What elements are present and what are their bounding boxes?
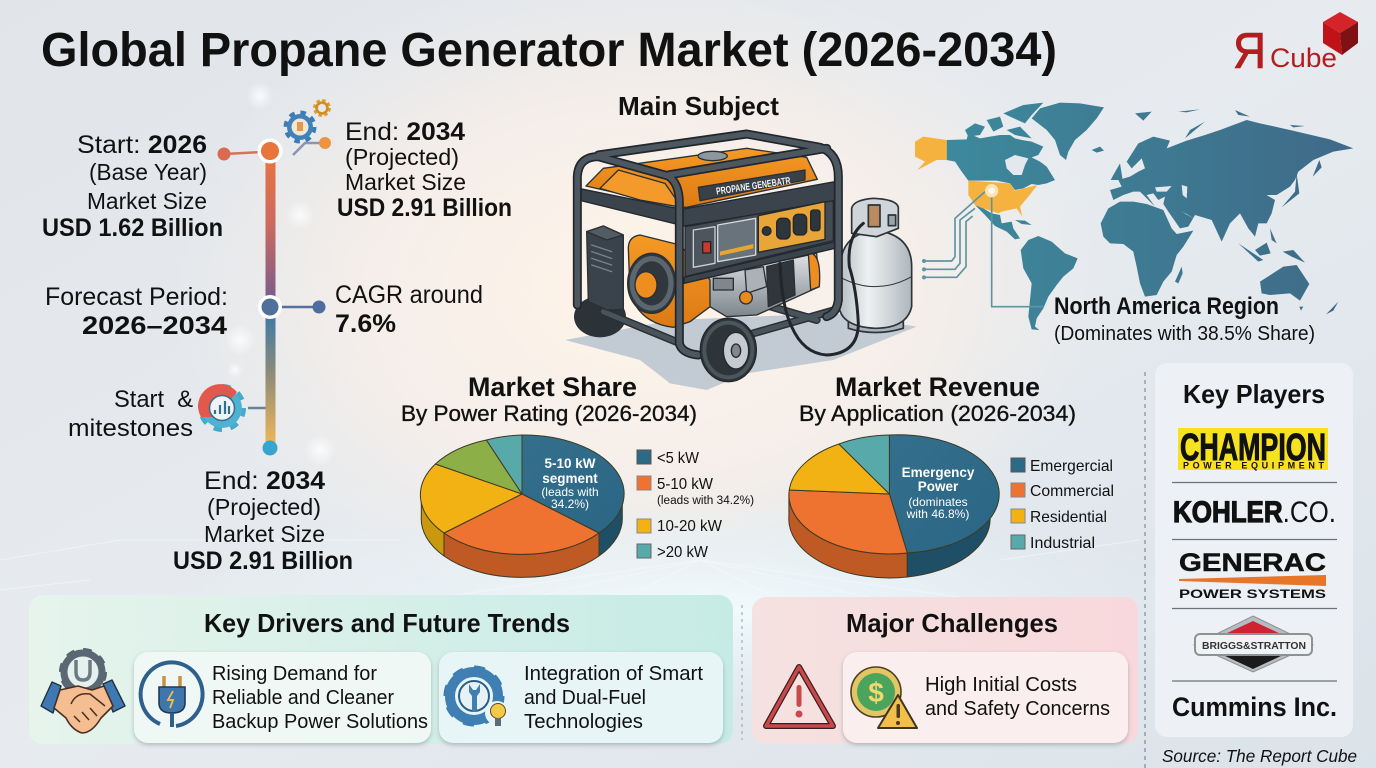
legend: power rating: 10-20 kW bbox=[657, 518, 722, 535]
propane tank bbox=[839, 198, 912, 332]
logo: champion: POWER EQUIPMENT bbox=[1183, 460, 1324, 470]
highlighted North America bbox=[915, 137, 1037, 217]
text: rising demand: Rising Demand for bbox=[212, 663, 377, 685]
text: end top: End: 2034 bbox=[345, 118, 465, 146]
pie label: 5-10 kW: segment bbox=[542, 471, 598, 486]
pie label: emergency power bbox=[902, 465, 975, 521]
pie label: 5-10 kW: 34.2%) bbox=[551, 497, 589, 511]
pie label: emergency power: Emergency bbox=[902, 465, 975, 480]
text: cagr: CAGR around bbox=[335, 281, 483, 309]
panel: major challenges bbox=[752, 597, 1138, 744]
card: high costs bbox=[843, 652, 1128, 743]
logo: kohler: KOHLER.CO. bbox=[1173, 496, 1336, 529]
alternator bbox=[707, 253, 820, 317]
text: forecast period: Forecast Period: bbox=[45, 283, 228, 311]
text: north america region: (Dominates with 38.5% Share) bbox=[1054, 323, 1315, 345]
card: rising demand bbox=[134, 652, 431, 743]
legend: power rating: <5 kW bbox=[657, 450, 699, 467]
legend: application: Industrial bbox=[1030, 535, 1095, 552]
icon: handshake with gear bbox=[41, 652, 125, 733]
icon: end gears bbox=[287, 102, 331, 149]
orange hood bbox=[586, 148, 817, 207]
heading: market share: By Power Rating (2026-2034) bbox=[401, 401, 697, 426]
heading: major challenges: Major Challenges bbox=[846, 608, 1058, 638]
heading: market share: Market Share bbox=[468, 372, 637, 402]
icon: dollar coin with warning bbox=[851, 667, 917, 728]
pie label: emergency power: Power bbox=[918, 479, 959, 494]
icon: milestones gear bbox=[198, 384, 242, 428]
text: rising demand: Backup Power Solutions bbox=[212, 711, 428, 733]
heading: key drivers: Key Drivers and Future Trends bbox=[204, 608, 570, 638]
icon: dollar coin with warning: $ bbox=[868, 677, 884, 708]
text: north america region: North America Region bbox=[1054, 293, 1279, 320]
text: high costs: High Initial Costs bbox=[925, 674, 1077, 696]
pie label: emergency power: with 46.8%) bbox=[906, 507, 969, 521]
text: high costs bbox=[925, 674, 1110, 720]
pie label: 5-10 kW: (leads with bbox=[541, 485, 599, 499]
illustration: propane generator: PROPANE GENEBATR bbox=[715, 176, 791, 198]
pie chart: power rating bbox=[420, 435, 624, 577]
source note: Source: The Report Cube bbox=[1162, 746, 1357, 766]
text: integration: Technologies bbox=[524, 711, 643, 733]
text: start: Start: 2026 bbox=[77, 131, 207, 159]
logo: generac: POWER SYSTEMS bbox=[1179, 589, 1326, 601]
legend: application bbox=[1011, 458, 1114, 552]
heading: key players: Key Players bbox=[1183, 379, 1325, 409]
text: end top bbox=[337, 118, 512, 222]
text: integration bbox=[524, 663, 703, 733]
text: cagr bbox=[335, 281, 483, 338]
logo: RCube: Cube bbox=[1270, 43, 1337, 73]
text: high costs: and Safety Concerns bbox=[925, 698, 1110, 720]
text: milestones bbox=[68, 386, 193, 442]
legend: power rating: (leads with 34.2%) bbox=[657, 495, 754, 507]
panel: key players bbox=[1155, 363, 1353, 737]
legend: application: Commercial bbox=[1030, 483, 1114, 500]
text: end bottom: Market Size bbox=[204, 521, 325, 547]
text: forecast period bbox=[45, 283, 228, 340]
heading: market revenue bbox=[799, 372, 1076, 426]
logo: briggs and stratton bbox=[1194, 616, 1313, 672]
engine bbox=[587, 226, 710, 327]
text: end top: USD 2.91 Billion bbox=[337, 194, 512, 222]
node: cagr bbox=[258, 295, 326, 319]
frame tubes bbox=[577, 134, 838, 355]
pie chart: application bbox=[789, 435, 999, 578]
control panel bbox=[578, 182, 835, 283]
node: start bbox=[218, 138, 282, 164]
front wheel bbox=[700, 318, 756, 382]
legend: application: Residential bbox=[1030, 509, 1107, 526]
text: forecast period: 2026–2034 bbox=[82, 312, 227, 340]
pie label: 5-10 kW: 5-10 kW bbox=[544, 456, 596, 471]
pie label: 5-10 kW bbox=[541, 456, 599, 511]
logo: generac bbox=[1179, 549, 1326, 601]
text: cagr: 7.6% bbox=[335, 310, 396, 338]
legend: power rating: >20 kW bbox=[657, 544, 708, 561]
text: rising demand bbox=[212, 663, 428, 733]
continents bbox=[947, 103, 1353, 330]
text: start: USD 1.62 Billion bbox=[42, 214, 223, 242]
text: start bbox=[42, 131, 223, 242]
text: start: (Base Year) bbox=[89, 159, 207, 185]
panel: key drivers and future trends bbox=[29, 595, 733, 744]
text: end bottom: (Projected) bbox=[207, 494, 321, 520]
heading: market revenue: By Application (2026-2034) bbox=[799, 401, 1076, 426]
heading: market share bbox=[401, 372, 697, 426]
title: Global Propane Generator Market (2026-2034) bbox=[41, 24, 1057, 77]
logo: cummins: Cummins Inc. bbox=[1172, 692, 1337, 722]
text: milestones: mitestones bbox=[68, 415, 193, 442]
timeline connectors bbox=[224, 143, 325, 408]
timeline bar bbox=[266, 150, 276, 445]
legend: power rating: 5-10 kW bbox=[657, 476, 713, 493]
text: end top: Market Size bbox=[345, 169, 466, 195]
text: integration: Integration of Smart bbox=[524, 663, 703, 685]
text: integration: and Dual-Fuel bbox=[524, 687, 646, 709]
text: rising demand: Reliable and Cleaner bbox=[212, 687, 394, 709]
timeline bbox=[42, 102, 512, 575]
node: end bbox=[262, 440, 278, 456]
location pin glow bbox=[985, 184, 998, 197]
icon: warning triangle bbox=[766, 667, 833, 726]
logo: RCube: Я bbox=[1233, 23, 1266, 79]
callout lines bbox=[924, 191, 1043, 307]
pie label: emergency power: (dominates bbox=[908, 495, 968, 509]
text: start: Market Size bbox=[87, 188, 207, 214]
text: end bottom bbox=[173, 467, 353, 575]
logo: generac: GENERAC bbox=[1179, 549, 1326, 577]
legend: power rating bbox=[637, 450, 754, 561]
logo: RCube bbox=[1233, 12, 1358, 79]
icon: plug bbox=[141, 662, 203, 727]
world map bbox=[915, 103, 1353, 330]
heading: main subject: Main Subject bbox=[618, 91, 779, 121]
text: end bottom: USD 2.91 Billion bbox=[173, 547, 353, 575]
text: milestones: Start & bbox=[114, 386, 193, 413]
icon: gear with bulb bbox=[448, 670, 509, 726]
hose bbox=[780, 223, 863, 355]
text: end top: (Projected) bbox=[345, 144, 459, 170]
text: end bottom: End: 2034 bbox=[204, 467, 325, 495]
text: north america region bbox=[1054, 293, 1315, 345]
card: integration bbox=[439, 652, 723, 743]
illustration: propane generator bbox=[565, 134, 917, 390]
heading: market revenue: Market Revenue bbox=[835, 372, 1040, 402]
logo: briggs and stratton: BRIGGS&STRATTON bbox=[1202, 640, 1306, 652]
legend: application: Emergercial bbox=[1030, 458, 1113, 475]
